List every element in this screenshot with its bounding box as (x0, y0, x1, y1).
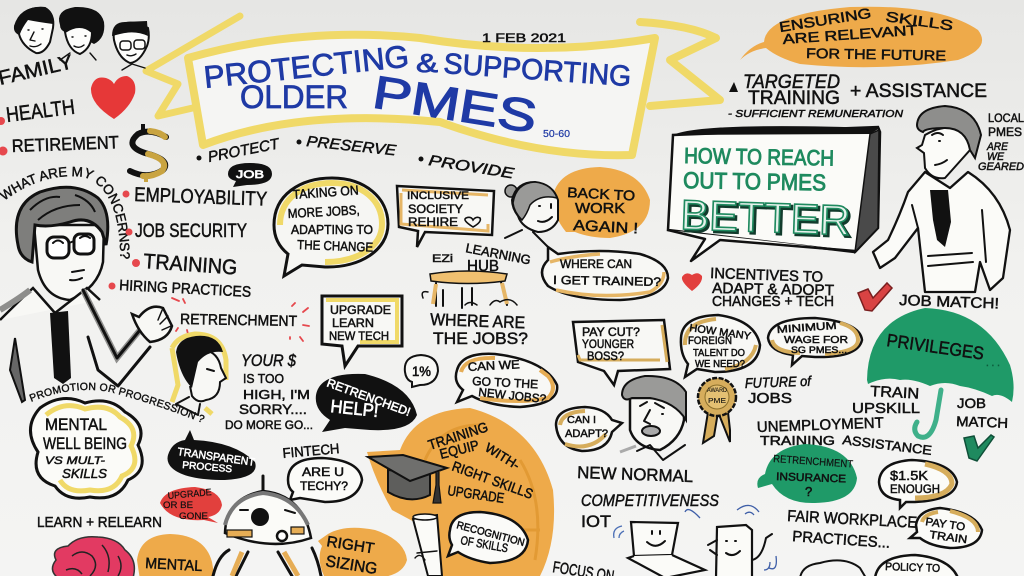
panel: how to reach out: OUT TO PMES (683, 167, 826, 195)
icon: BB8 robot (213, 476, 321, 576)
bubble: pay cut younger boss: YOUNGER (582, 339, 634, 351)
bubble: back to work again: BACK TO (567, 184, 636, 204)
training text (426, 418, 535, 506)
bubble: retrenched help (316, 374, 417, 432)
learning hub labels: LEARNING (464, 240, 532, 268)
icon: green umbrella: . . . (986, 358, 1000, 369)
fair workplace practices (787, 508, 918, 552)
banner ribbon (146, 16, 720, 155)
train upskill labels: JOB (957, 395, 986, 411)
your dollar text: DO MORE GO... (225, 418, 313, 432)
bubble: taking on more jobs: MORE JOBS, (287, 202, 360, 221)
employability list (108, 184, 268, 301)
retrenchment heading: RETRENCHMENT (180, 311, 297, 330)
bubble: are you techy: TECHY? (300, 479, 348, 493)
job bubble (228, 163, 272, 187)
bubble: taking on more jobs: TAKING ON (292, 182, 359, 202)
bubble: can I adapt (556, 407, 622, 451)
bubble: pay to train (910, 508, 982, 548)
your dollar text: SORRY.... (239, 401, 307, 417)
targeted training and assistance: TARGETED (743, 72, 840, 93)
retirement item: RETIREMENT (11, 132, 119, 156)
unemployment training assistance: TRAINING (760, 433, 835, 448)
cloud outline (800, 560, 866, 576)
bubble: pay cut younger boss: PAY CUT? (582, 327, 640, 339)
bubble: minimum wage: SG PMES... (791, 345, 847, 355)
incentives block (682, 265, 834, 310)
icon: green check (964, 435, 994, 461)
bubble: where can I get trained: I GET TRAINED? (553, 273, 662, 289)
new normal competitiveness IoT: IOT (581, 512, 611, 531)
panel: how to reach out (668, 126, 880, 261)
health item: HEALTH (5, 96, 76, 127)
employability list: HIRING PRACTICES (119, 277, 251, 301)
bubble: how many foreign talent: HOW MANY (689, 322, 752, 343)
your dollar text: IS TOO (243, 371, 284, 386)
unemployment training assistance (757, 415, 933, 458)
learning hub labels (432, 240, 532, 275)
local PMEs question: GEARED (978, 161, 1024, 173)
training text: EQUIP (438, 437, 481, 462)
future of jobs (745, 373, 813, 407)
bubble: where can I get trained: WHERE CAN (560, 257, 632, 271)
bubble: 1.5k enough: $1.5K (890, 468, 928, 483)
icon: diploma scroll (413, 514, 442, 576)
bubble: how many foreign talent: FOREIGN (688, 335, 732, 347)
bubble: can we go to the new jobs: GO TO THE (472, 374, 538, 391)
bubble: transparent process: PROCESS (182, 460, 233, 475)
cloud: mental well being: MENTAL (45, 415, 107, 434)
date: 1 FEB 2021 (482, 31, 566, 45)
new normal competitiveness IoT: COMPETITIVENESS (581, 491, 720, 510)
bubble: how many foreign talent: TALENT DO (693, 347, 745, 359)
learning hub labels: EZi (432, 253, 453, 265)
employability list: JOB SECURITY (135, 221, 247, 242)
icon: family faces (14, 7, 149, 70)
cloud: mental well being (30, 399, 142, 498)
bubble: pay to train: TRAIN (929, 529, 968, 546)
targeted training and assistance: TRAINING (748, 88, 840, 109)
title: 50-60 (543, 129, 570, 140)
targeted training and assistance: - SUFFICIENT REMUNERATION (728, 109, 904, 120)
title: OLDER (240, 79, 348, 115)
local PMEs question: WE (987, 151, 1005, 163)
employability list: EMPLOYABILITY (134, 184, 268, 211)
bubble: taking on more jobs (274, 178, 388, 276)
bubble: back to work again (553, 167, 650, 238)
panel: how to reach out: BETTER (680, 191, 851, 244)
where are the jobs: THE JOBS? (433, 329, 528, 348)
protect preserve provide: PROVIDE (427, 152, 516, 183)
bubble: right sizing: RIGHT (325, 533, 375, 557)
icon: green umbrella: PRIVILEGES (885, 330, 985, 364)
bubble: minimum wage: WAGE FOR (784, 334, 848, 346)
bubble: right sizing (318, 528, 407, 576)
bubble: upgrade or be gone: UPGRADE (167, 487, 212, 502)
bubble: ensuring skills: ENSURING (778, 5, 872, 35)
bubble: pay cut younger boss (573, 320, 670, 385)
bubble: how many foreign talent: WE NEED? (695, 358, 745, 370)
bubble: ensuring skills (740, 5, 982, 67)
bubble: inclusive society rehire: INCLUSIVE (407, 190, 469, 202)
training text: RIGHT SKILLS (450, 458, 535, 502)
employability list: TRAINING (143, 250, 238, 280)
bubble: minimum wage: MINIMUM (776, 320, 837, 336)
protect preserve provide: PROTECT (207, 135, 282, 166)
protect preserve provide (196, 133, 516, 183)
title: SUPPORTING (443, 48, 632, 93)
title: PROTECTING (202, 39, 411, 95)
icon: award rosette: AWARD (707, 388, 728, 394)
icon: graduation cap (368, 455, 447, 503)
panel: how to reach out: BETTER (682, 193, 853, 246)
bubble: transparent process (168, 430, 256, 480)
fintech label: FINTECH (282, 440, 340, 461)
cloud: mental well being: VS MULT- (45, 455, 105, 467)
icon: brain (52, 537, 134, 576)
incentives block: INCENTIVES TO (710, 265, 823, 286)
unemployment training assistance: UNEMPLOYMENT (757, 415, 884, 436)
bubble: 1 percent (405, 355, 438, 387)
learning hub labels: HUB (467, 258, 499, 275)
bubble: 1 percent: 1% (412, 363, 431, 379)
bubble: pay cut younger boss: BOSS? (587, 351, 624, 363)
bubble: upgrade learn new tech: LEARN (332, 316, 374, 330)
your dollar text: HIGH, I'M (243, 387, 310, 402)
bubble: can I adapt: ADAPT? (565, 428, 608, 440)
icon: concerned man with glasses (0, 187, 172, 402)
bubble: where can I get trained (542, 247, 668, 300)
icon: green umbrella (867, 308, 1014, 437)
bubble: upgrade or be gone: GONE (179, 511, 208, 522)
train upskill labels: TRAIN (870, 383, 920, 403)
learn and relearn heading: LEARN + RELEARN (37, 514, 162, 531)
bubble: mental models (137, 534, 215, 576)
bubble: ensuring skills: SKILLS (885, 8, 954, 33)
orange training blob (367, 408, 554, 576)
bubble: can we go to the new jobs: CAN WE (467, 357, 520, 374)
bubble: upgrade learn new tech: NEW TECH (329, 329, 389, 343)
new normal competitiveness IoT: NEW NORMAL (577, 463, 693, 486)
bubble: upgrade or be gone: OR BE (163, 500, 193, 511)
training text: TRAINING (426, 418, 490, 453)
bubble: upgrade learn new tech: UPGRADE (330, 303, 391, 317)
bubble: 1.5k enough: ENOUGH (890, 482, 940, 496)
bubble: inclusive society rehire: SOCIETY (408, 202, 463, 216)
bubble: upgrade or be gone (160, 487, 222, 523)
icon: award rosette: PME (708, 398, 726, 405)
icon: woman face (505, 182, 558, 246)
bubble: are you techy (288, 458, 362, 502)
bubble: ensuring skills: FOR THE FUTURE (806, 45, 946, 63)
train upskill labels: MATCH (956, 413, 1008, 431)
bubble: minimum wage (768, 318, 862, 365)
train upskill labels (852, 383, 1008, 431)
unemployment training assistance: ASSISTANCE (842, 432, 933, 458)
where are the jobs (430, 310, 528, 348)
bubble: recognition of skills: OF SKILLS (459, 533, 509, 555)
local PMEs question: ARE (986, 141, 1009, 153)
bubble: retrenchment insurance: ? (805, 484, 812, 499)
local PMEs question: PMES (988, 125, 1022, 139)
bubble: back to work again: AGAIN ! (573, 217, 639, 237)
bubble: policy to help: POLICY TO (885, 561, 941, 575)
bubble: inclusive society rehire (397, 186, 494, 247)
bubble: transparent process: TRANSPARENT (177, 446, 256, 469)
where are the jobs: WHERE ARE (430, 310, 525, 332)
title (202, 39, 632, 143)
icon: smiling laptop (614, 522, 705, 576)
concerns arc heading: WHAT ARE MY CONCERNS? (0, 166, 130, 259)
your dollar text: YOUR $ (241, 351, 296, 370)
bubble: retrenchment insurance (757, 444, 857, 503)
incentives block: ADAPT & ADOPT (712, 280, 834, 299)
icon: red heart (91, 76, 135, 119)
bubble: recognition of skills (448, 512, 528, 563)
bubble: retrenchment insurance: INSURANCE (776, 471, 846, 485)
training text: UPGRADE (447, 482, 505, 506)
bubble: can we go to the new jobs: NEW JOBS? (478, 385, 547, 406)
job bubble: JOB (236, 169, 264, 181)
bubble: pay to train: PAY TO (925, 516, 966, 534)
bubble: upgrade learn new tech (322, 296, 402, 366)
bubble: recognition of skills: RECOGNITION (455, 519, 526, 549)
bubble: taking on more jobs: THE CHANGE (297, 237, 374, 255)
cloud: mental well being: WELL BEING (43, 434, 127, 453)
panel: how to reach out: HOW TO REACH (684, 143, 834, 171)
icon: dollar sign (130, 124, 166, 182)
icon: red check (858, 283, 892, 311)
bubble: retrenched help: HELP! (330, 396, 379, 421)
bubble: ensuring skills: ARE RELEVANT (782, 22, 918, 47)
title: PMES (369, 66, 541, 143)
bubble: back to work again: WORK (575, 200, 625, 217)
future of jobs: FUTURE of (745, 373, 813, 391)
icon: smiling phone (685, 505, 776, 576)
protect preserve provide: PRESERVE (306, 133, 398, 159)
bubble: retrenchment insurance: RETRENCHMENT (773, 453, 854, 471)
bubble: can I adapt: CAN I (567, 414, 596, 426)
job match heading: JOB MATCH! (899, 292, 999, 312)
bubble: inclusive society rehire: REHIRE (408, 215, 458, 229)
targeted training and assistance (728, 72, 987, 120)
icon: man in shirt and tie (873, 106, 1010, 292)
bubble: are you techy: ARE U (302, 465, 344, 479)
local PMEs question (978, 111, 1024, 173)
bubble: policy to help (875, 555, 958, 576)
training text: WITH- (482, 440, 523, 473)
bubble: can we go to the new jobs (456, 354, 557, 407)
bubble: taking on more jobs: ADAPTING TO (291, 222, 373, 237)
bubble: mental models: MENTAL (145, 555, 203, 575)
bubble: retrenched help: RETRENCHED! (325, 376, 412, 419)
icon: retrenched man face (172, 334, 226, 415)
targeted training and assistance: + ASSISTANCE (850, 81, 987, 102)
bubble: how many foreign talent (681, 315, 760, 377)
bubble: 1.5k enough (879, 460, 957, 508)
title: & (416, 48, 438, 78)
icon: worried man (620, 376, 686, 460)
fair workplace practices: PRACTICES... (792, 528, 891, 552)
future of jobs: JOBS (748, 390, 792, 407)
fair workplace practices: FAIR WORKPLACE (787, 508, 918, 532)
incentives block: CHANGES + TECH (712, 293, 834, 310)
retrenchment heading (172, 298, 309, 341)
promotion arc text: PROMOTION OR PROGRESSION ? (29, 382, 205, 422)
new normal competitiveness IoT (551, 463, 720, 576)
your dollar text (225, 351, 313, 432)
icon: learning hub building (422, 271, 517, 308)
train upskill labels: UPSKILL (852, 400, 920, 417)
cloud: mental well being: SKILLS (62, 466, 107, 481)
icon: award rosette (698, 378, 736, 443)
